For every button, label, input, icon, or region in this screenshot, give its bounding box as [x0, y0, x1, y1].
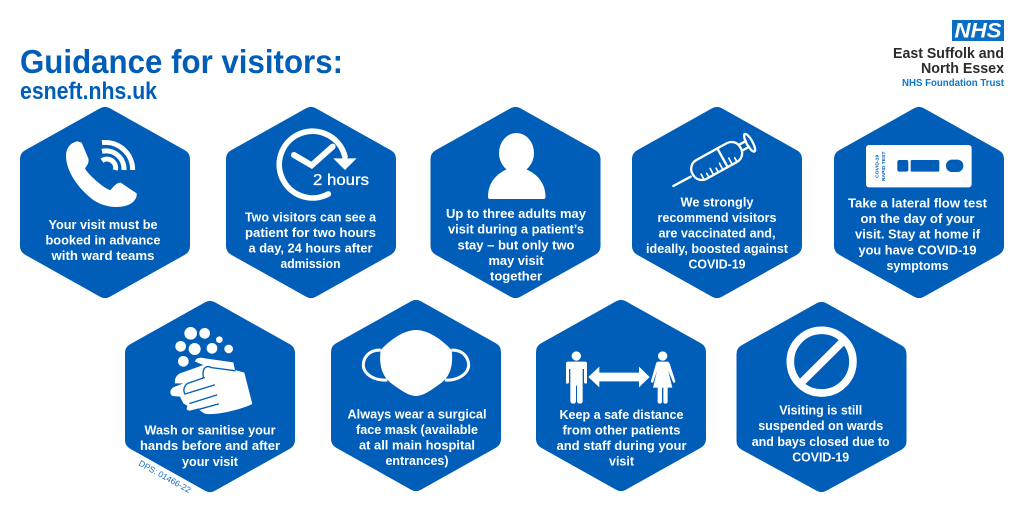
icon: rapid test cassette: [866, 145, 972, 187]
text: Visiting is still: [779, 402, 862, 418]
icon: two people with distance arrow: [566, 351, 675, 404]
NHS badge: NHS: [954, 20, 1002, 42]
text: symptoms: [886, 258, 948, 273]
text: a day, 24 hours after: [248, 240, 372, 256]
text: with ward teams: [50, 248, 155, 263]
text: COVID-19: [688, 256, 746, 272]
text: [245, 210, 377, 271]
icon: clock with arrow: [279, 131, 357, 198]
panel: three adults: [440, 117, 590, 288]
text: Keep a safe distance: [560, 407, 684, 422]
text: [556, 407, 686, 468]
icon: rapid test cassette: RAPID TEST: [881, 152, 887, 181]
text: you have COVID-19: [858, 242, 976, 258]
text: admission: [280, 256, 341, 271]
text: ideally, boosted against: [646, 241, 789, 256]
icon label: 2 hours: 2 hours: [313, 172, 369, 189]
text: and staff during your: [556, 438, 686, 453]
panel: booked in advance: [30, 117, 180, 288]
text: Take a lateral flow test: [848, 196, 988, 210]
text: patient for two hours: [245, 225, 376, 240]
panel: face mask: [341, 310, 491, 481]
trust name line 2: North Essex: [921, 60, 1005, 77]
text: are vaccinated and,: [658, 226, 776, 240]
text: [848, 196, 988, 273]
icon: syringe: [673, 132, 757, 186]
text: from other patients: [562, 422, 680, 438]
text: We strongly: [680, 194, 754, 210]
text: visit during a patient’s: [448, 222, 584, 236]
trust name: East Suffolk and: [893, 45, 1004, 62]
text: [752, 402, 890, 464]
text: [140, 422, 280, 469]
text: at all main hospital: [359, 438, 475, 452]
text: Up to three adults may: [446, 206, 587, 221]
text: Two visitors can see a: [245, 210, 377, 224]
icon: person: [488, 133, 546, 199]
icon: washing hands: [170, 327, 252, 414]
text: booked in advance: [46, 232, 160, 248]
panel: vaccination: [642, 117, 792, 288]
text: may visit: [488, 253, 544, 268]
icon: no entry sign: [790, 330, 853, 393]
website address: esneft.nhs.uk: [20, 78, 158, 105]
text: your visit: [182, 454, 239, 469]
text: entrances): [386, 453, 448, 468]
panel: hand washing: [135, 311, 285, 482]
text: Your visit must be: [48, 217, 158, 232]
text: suspended on wards: [758, 418, 883, 433]
text: COVID-19: [792, 450, 849, 464]
icon: telephone: [66, 141, 137, 207]
document reference: DPS: 01466-22: [137, 458, 193, 495]
NHS trust logo: [893, 20, 1005, 89]
icon: surgical mask: [363, 330, 469, 396]
title: Guidance for visitors:: [20, 43, 343, 80]
icon: rapid test cassette: COVID-19: [874, 155, 880, 178]
panel: safe distance: [546, 310, 696, 481]
text: recommend visitors: [658, 210, 776, 225]
text: [348, 406, 486, 468]
text: Wash or sanitise your: [144, 422, 276, 438]
text: [446, 206, 587, 284]
panel: lateral flow test: [844, 117, 994, 288]
text: [46, 217, 160, 263]
panel: two visitors for two hours: [236, 117, 386, 288]
panel: suspended wards: [746, 312, 896, 482]
text: face mask (available: [356, 422, 478, 437]
foundation trust line: NHS Foundation Trust: [902, 78, 1005, 89]
text: [646, 194, 789, 272]
text: and bays closed due to: [752, 434, 890, 449]
text: visit. Stay at home if: [855, 226, 981, 242]
text: stay – but only two: [458, 238, 575, 252]
text: on the day of your: [860, 211, 974, 226]
text: together: [490, 268, 542, 284]
text: Always wear a surgical: [348, 406, 486, 422]
text: visit: [609, 454, 635, 468]
text: hands before and after: [140, 438, 280, 453]
